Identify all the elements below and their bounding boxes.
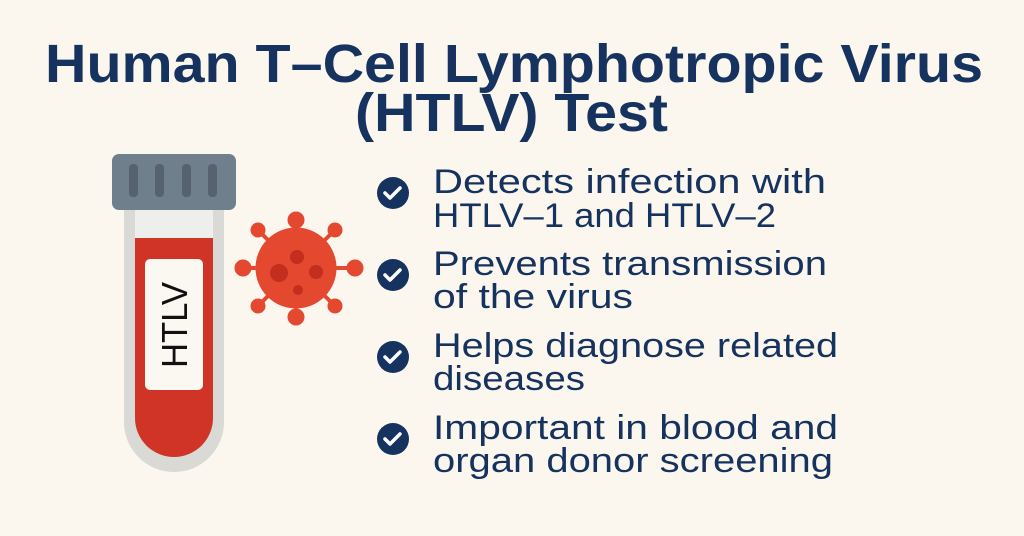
bullet 2: of the virus	[433, 278, 633, 316]
title: (HTLV) Test	[355, 83, 668, 143]
bullet 2	[377, 245, 827, 316]
tube label: HTLV	[154, 282, 195, 368]
bullet 1: HTLV–1 and HTLV–2	[433, 197, 776, 235]
icon: test tube	[112, 154, 236, 472]
bullet 1: Detects infection with	[433, 163, 826, 201]
bullet list	[377, 163, 838, 480]
bullet 1	[377, 163, 826, 235]
bullet 3: diseases	[433, 360, 585, 398]
bullet 4: organ donor screening	[433, 442, 833, 480]
bullet 4	[377, 409, 838, 480]
bullet 3	[377, 327, 838, 398]
title	[45, 34, 983, 143]
icon: virus	[235, 212, 363, 325]
bullet 4: Important in blood and	[433, 409, 838, 447]
tube label	[145, 259, 203, 390]
bullet 3: Helps diagnose related	[433, 327, 838, 365]
bullet 2: Prevents transmission	[433, 245, 827, 283]
title: Human T–Cell Lymphotropic Virus	[45, 34, 983, 94]
